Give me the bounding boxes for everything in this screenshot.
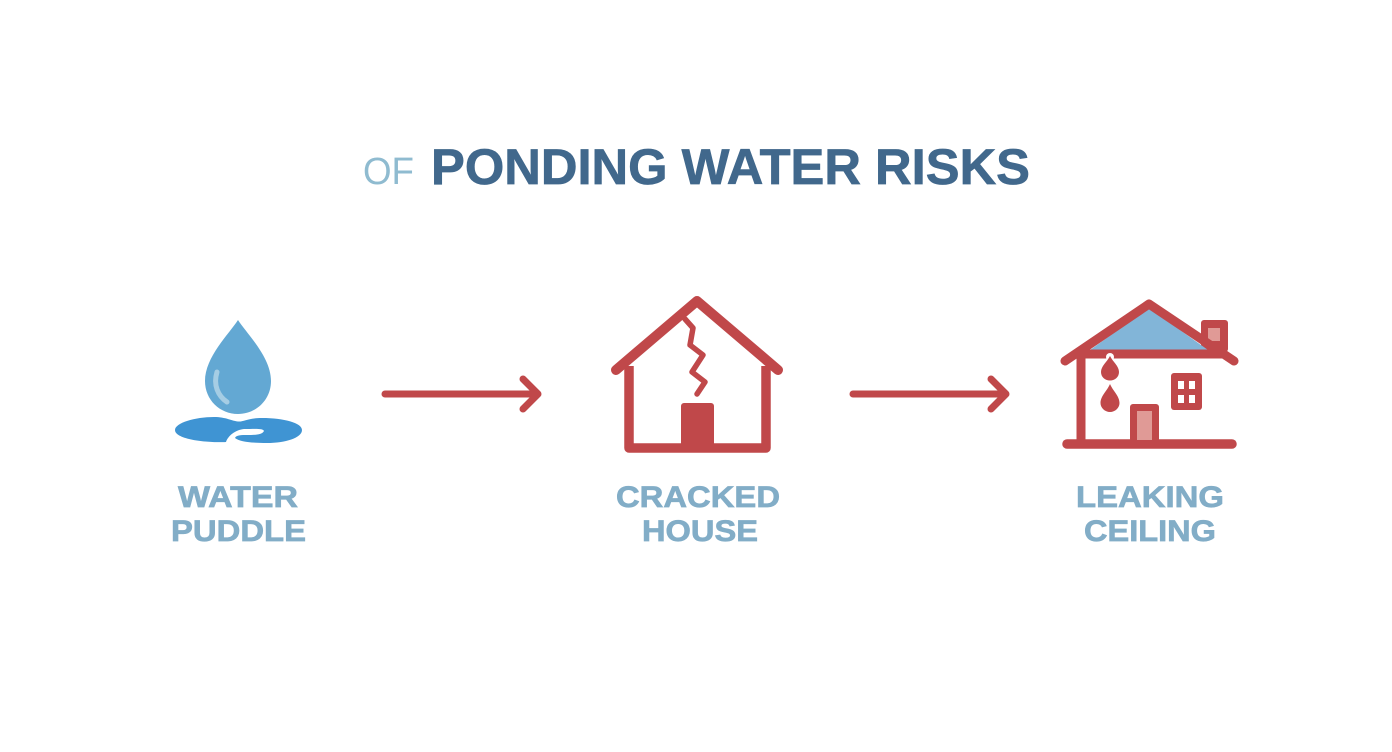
label: cracked house [616, 481, 780, 548]
arrow: cracked house to leaking ceiling [853, 379, 1006, 409]
label: water puddle: PUDDLE [171, 515, 306, 548]
title: OF [363, 151, 414, 193]
label: water puddle [171, 481, 306, 548]
arrow: puddle to cracked house [385, 379, 538, 409]
label: water puddle: WATER [178, 481, 298, 514]
label: cracked house: CRACKED [616, 481, 780, 514]
label: leaking ceiling [1076, 481, 1224, 548]
icon: leaking ceiling house [1065, 304, 1234, 444]
label: leaking ceiling: LEAKING [1076, 481, 1224, 514]
icon: cracked house [616, 301, 778, 448]
label: cracked house: HOUSE [642, 515, 758, 548]
title: PONDING WATER RISKS [431, 139, 1030, 195]
icon: water drop and puddle [175, 320, 302, 443]
label: leaking ceiling: CEILING [1084, 515, 1216, 548]
